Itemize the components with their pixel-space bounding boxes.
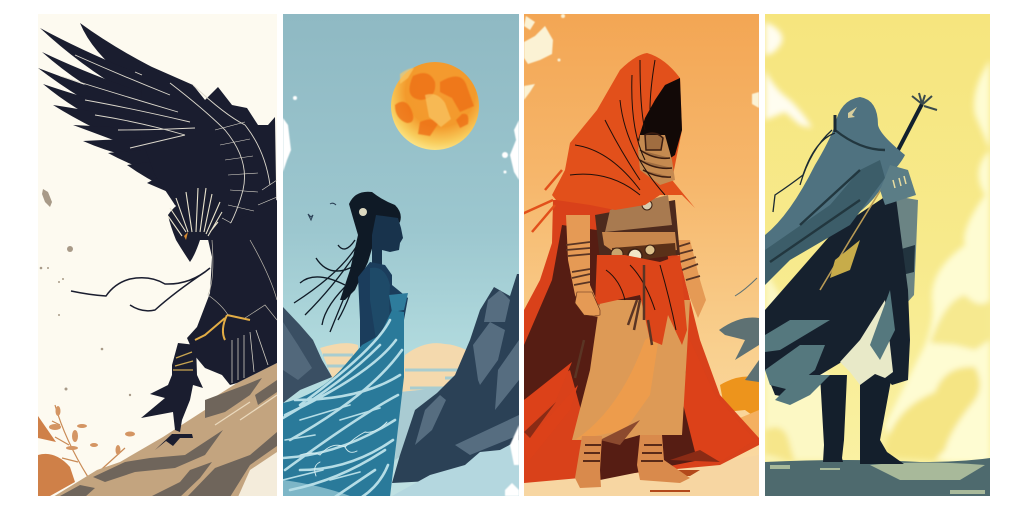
hair ornament	[359, 208, 367, 216]
sky	[283, 14, 519, 496]
tendrils	[71, 268, 210, 311]
left mountain	[283, 307, 332, 403]
hand	[575, 292, 600, 316]
shoulder plates	[880, 165, 916, 205]
sky	[524, 14, 759, 496]
cape	[765, 97, 905, 262]
talons and leg lines	[173, 240, 277, 383]
panel background	[38, 14, 277, 496]
panel: hooded wanderer	[520, 14, 759, 496]
speckles	[40, 189, 131, 396]
clouds	[765, 22, 990, 462]
masked face wraps	[638, 135, 675, 185]
cape back outer	[524, 200, 759, 483]
wing feathers	[38, 23, 276, 227]
head ornament	[848, 107, 857, 118]
lower garment	[572, 300, 690, 440]
snow foreground	[392, 440, 519, 496]
arm armor	[888, 195, 918, 305]
belt	[602, 200, 677, 263]
rocky slope	[53, 363, 277, 497]
eagle	[38, 23, 277, 450]
hair tendrils	[773, 130, 835, 212]
torso	[358, 262, 408, 347]
hair	[340, 192, 401, 300]
sky	[765, 14, 990, 496]
feather leg	[141, 343, 203, 432]
hood and mantle	[552, 53, 695, 210]
hood opening	[638, 78, 682, 165]
dress	[283, 310, 404, 497]
hood fold lines	[570, 60, 665, 195]
panel: moon and woman	[283, 14, 519, 497]
head	[168, 206, 208, 262]
head and neck	[372, 215, 403, 265]
waist wrap red	[595, 255, 687, 345]
moon	[391, 62, 479, 150]
splatter top left	[524, 14, 759, 108]
wing lines	[60, 55, 277, 237]
sand hills	[320, 343, 466, 392]
arms	[566, 215, 601, 317]
desert dunes	[720, 376, 759, 414]
foot	[155, 434, 193, 450]
woman silhouette	[283, 192, 408, 497]
head crest	[168, 188, 222, 236]
cloaked figure	[765, 93, 937, 464]
left orange hill and plant	[38, 405, 135, 496]
body	[187, 200, 277, 385]
robe	[765, 190, 910, 400]
hooded figure	[520, 53, 759, 488]
birds	[308, 203, 336, 220]
ground	[765, 458, 990, 496]
ground	[524, 455, 759, 496]
cape inner dark	[524, 225, 700, 480]
feet	[575, 435, 690, 488]
palm fronds	[719, 318, 759, 382]
paint splatter	[283, 96, 519, 496]
torso armor	[595, 200, 680, 260]
legs and boots	[820, 375, 904, 464]
right mountain	[392, 274, 519, 483]
panel: eagle	[38, 14, 277, 497]
gold strap	[820, 178, 888, 290]
hanging tassels	[575, 265, 652, 378]
panel: cloaked traveller	[765, 14, 990, 496]
staff	[895, 93, 937, 156]
